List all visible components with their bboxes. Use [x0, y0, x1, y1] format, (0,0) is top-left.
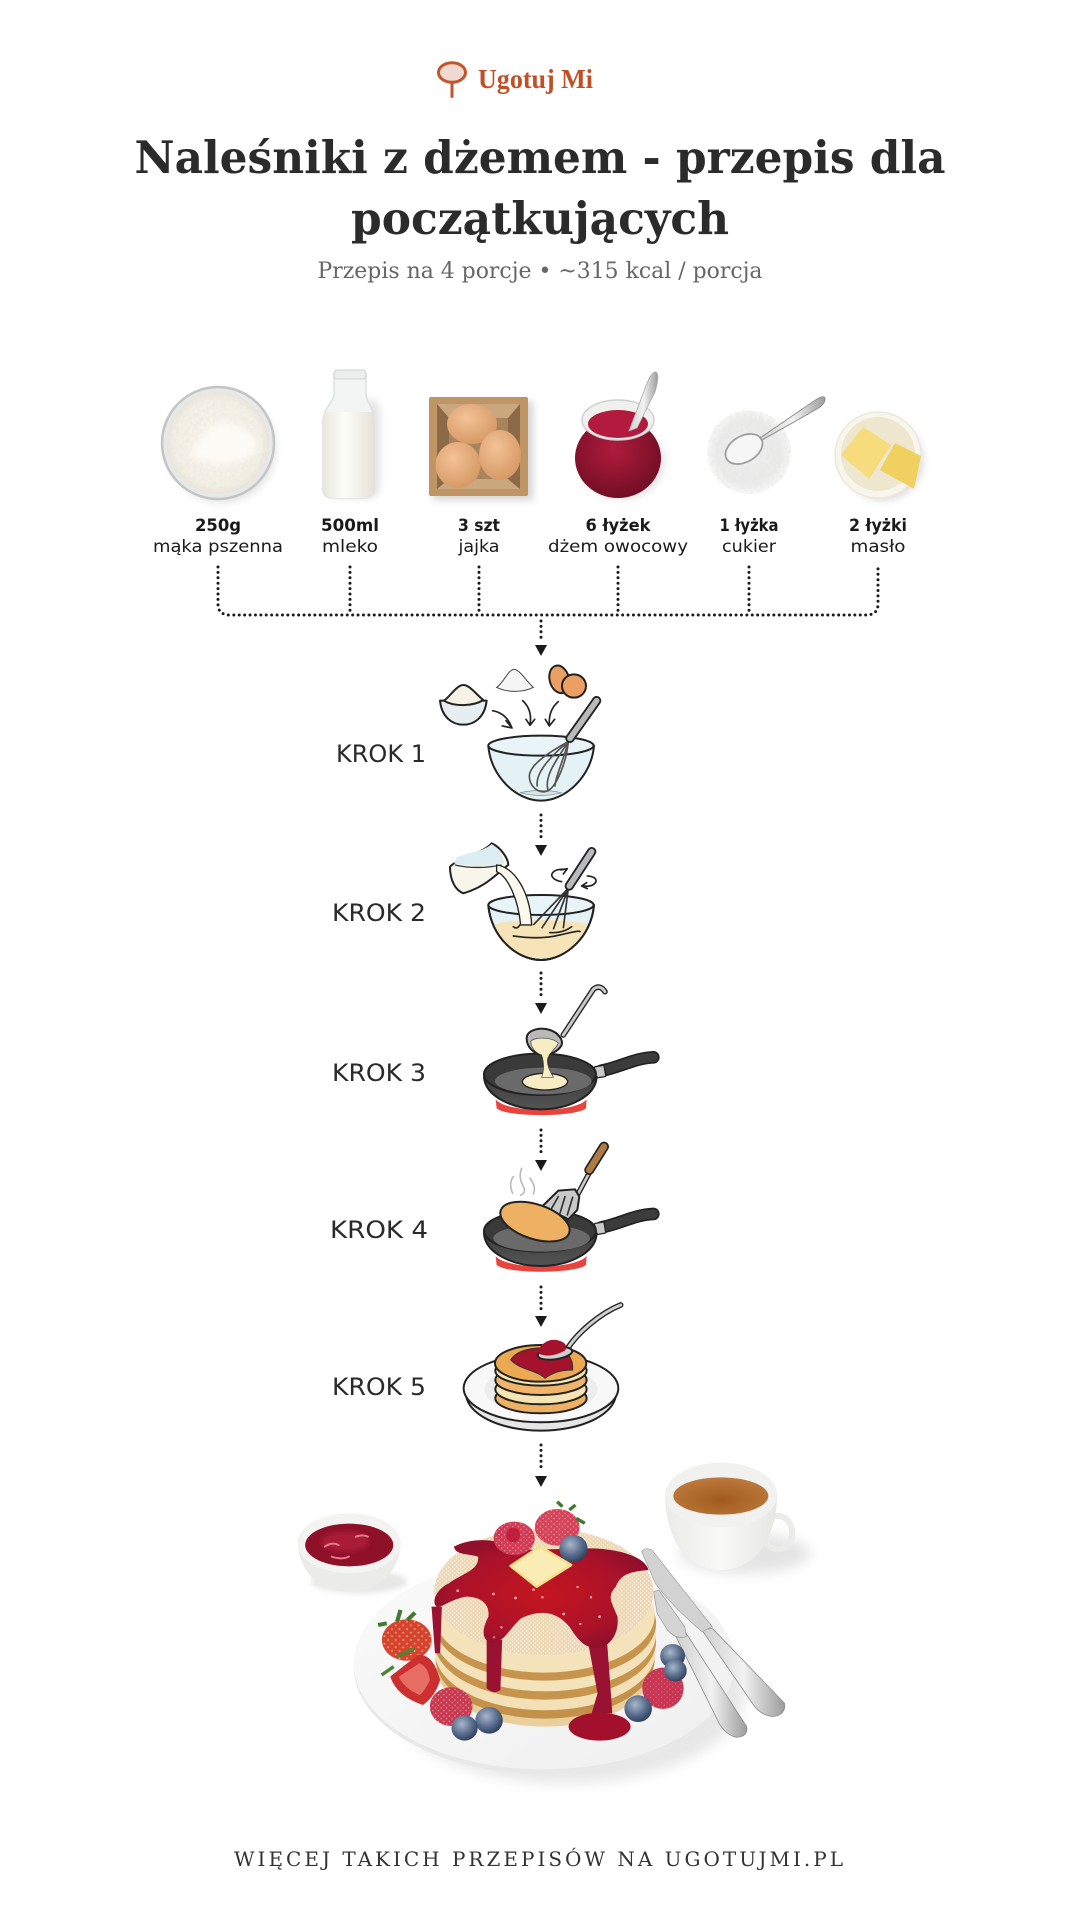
cutlery: [642, 1549, 785, 1737]
ingredient labels: jajka: [457, 537, 500, 557]
title: Naleśniki z dżemem - przepis dla: [134, 132, 946, 184]
ingredient labels: dżem owocowy: [548, 537, 688, 557]
pancake stack: [434, 1528, 656, 1727]
logo: Ugotuj Mi: [438, 63, 593, 96]
tea cup: [665, 1463, 810, 1573]
step 3 illustration: ladle over frying pan: [484, 987, 653, 1115]
step 2 label: KROK 2: [332, 899, 426, 927]
plate: [354, 1557, 745, 1783]
step 4 illustration: flipping pancake: [484, 1147, 653, 1272]
arrow 2: [535, 815, 547, 856]
ingredient labels: 3 szt: [458, 516, 500, 536]
ingredient labels: masło: [850, 537, 906, 557]
ingredient labels: cukier: [722, 537, 776, 557]
dotted connector from ingredients: [218, 567, 878, 615]
ingredient labels: 2 łyżki: [849, 516, 907, 536]
ingredient labels: 6 łyżek: [586, 516, 651, 536]
step 1 label: KROK 1: [336, 740, 426, 768]
title: początkujących: [351, 193, 729, 245]
arrow 4: [535, 1130, 547, 1171]
arrow 1: [535, 621, 547, 656]
logo: Ugotuj Mi: Ugotuj Mi: [478, 64, 593, 94]
step 4 label: KROK 4: [330, 1216, 428, 1244]
ingredient: milk bottle: [323, 370, 380, 498]
footer: WIĘCEJ TAKICH PRZEPISÓW NA UGOTUJMI.PL: [234, 1846, 846, 1871]
ingredient: butter bowl: [835, 412, 923, 500]
step 2 illustration: pouring milk and whisking: [450, 843, 596, 960]
ingredient: eggs in wooden crate: [429, 397, 533, 500]
step 4: [330, 1147, 653, 1272]
arrow 6: [535, 1445, 547, 1487]
step 3: [332, 987, 653, 1115]
ingredient labels: [153, 516, 907, 557]
arrow 5: [535, 1287, 547, 1327]
ingredient labels: mleko: [322, 537, 378, 557]
step 3 label: KROK 3: [332, 1059, 426, 1087]
subtitle: Przepis na 4 porcje • ~315 kcal / porcja: [318, 259, 762, 284]
ingredient: sugar with spoon: [707, 397, 825, 494]
step 5: [332, 1305, 621, 1431]
panel: ingredients: [153, 370, 923, 557]
jam topping: [432, 1540, 649, 1741]
ingredient labels: 250g: [195, 516, 241, 536]
arrow 3: [535, 973, 547, 1014]
step 2: [332, 843, 596, 960]
step 1: [336, 663, 597, 801]
ingredient: flour bowl: [162, 387, 276, 503]
ingredient labels: mąka pszenna: [153, 537, 283, 557]
final dish: pancakes with jam: [298, 1463, 810, 1783]
berries: [378, 1502, 687, 1741]
ingredient: jam jar with spoon: [575, 372, 664, 499]
ingredient labels: 1 łyżka: [720, 516, 778, 536]
ingredient labels: 500ml: [321, 516, 379, 536]
butter: [511, 1547, 571, 1587]
jam bowl: [298, 1513, 407, 1593]
step 5 illustration: jam on pancakes: [464, 1305, 621, 1431]
step 5 label: KROK 5: [332, 1373, 426, 1401]
step 1 illustration: ingredients into bowl: [440, 663, 597, 801]
